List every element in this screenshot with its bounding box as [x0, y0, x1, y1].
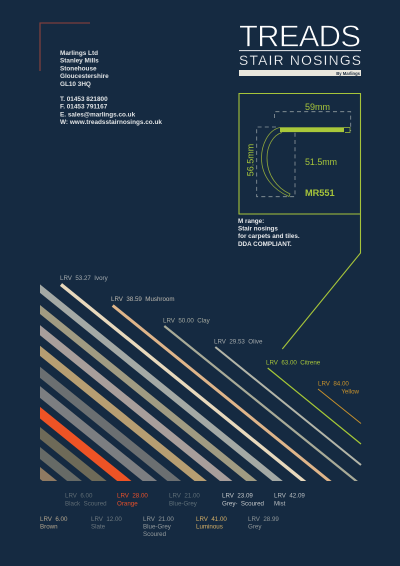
bottom legend row 2: Blue-Grey — [143, 524, 172, 531]
bottom legend row 2: Slate — [91, 524, 106, 531]
product description: Stair nosings — [238, 226, 278, 233]
product description: for carpets and tiles. — [238, 233, 300, 240]
profile diagram MR551: 56.5mm — [246, 144, 256, 176]
product description: DDA COMPLIANT. — [238, 241, 292, 248]
stripe labels: LRV 38.59 Mushroom — [111, 296, 175, 303]
bottom legend row 2: Brown — [40, 524, 58, 531]
bottom legend row 2: Luminous — [196, 524, 223, 531]
bottom legend row 2: LRV 21.00 — [143, 516, 174, 523]
logo: Treads Stair Nosings: By Marlings — [336, 71, 361, 76]
profile diagram MR551: MR551 — [305, 188, 335, 198]
bottom legend row 2 — [40, 516, 279, 538]
address block: Stonehouse — [60, 65, 97, 72]
stripe labels: LRV 29.53 Olive — [214, 338, 263, 346]
bottom legend row 1: LRV 23.09 — [222, 493, 253, 500]
address block: E. sales@marlings.co.uk — [60, 111, 136, 118]
bottom legend row 1: Grey- Scoured — [222, 500, 265, 507]
bottom legend row 1: LRV 6.00 — [65, 493, 93, 500]
bottom legend row 1: Blue-Grey — [169, 500, 198, 507]
stripe labels: Yellow — [341, 388, 360, 396]
bottom legend row 2: Scoured — [143, 531, 167, 538]
address block — [60, 50, 162, 126]
bottom legend row 1: Mist — [274, 500, 286, 507]
address block: GL10 3HQ — [60, 81, 91, 88]
bottom legend row 2: LRV 12.00 — [91, 516, 122, 523]
logo: Treads Stair Nosings: STAIR NOSINGS — [239, 53, 361, 68]
address block: W: www.treadsstairnosings.co.uk — [60, 119, 162, 126]
red corner bracket — [40, 23, 90, 71]
logo: Treads Stair Nosings — [239, 18, 361, 76]
stripe labels — [60, 275, 360, 396]
profile diagram MR551 — [246, 102, 351, 198]
logo: Treads Stair Nosings: TREADS — [239, 18, 361, 54]
bottom legend row 2: LRV 28.99 — [248, 516, 279, 523]
bottom legend row 1: LRV 42.09 — [274, 493, 305, 500]
bottom legend row 1: Orange — [117, 500, 138, 507]
address block: F. 01453 791167 — [60, 104, 108, 111]
bottom legend row 1: Black Scoured — [65, 500, 107, 507]
address block: T. 01453 821800 — [60, 96, 108, 103]
bottom legend row 2: LRV 41.00 — [196, 516, 227, 523]
bottom legend row 1: LRV 21.00 — [169, 493, 200, 500]
address block: Gloucestershire — [60, 73, 109, 80]
profile diagram MR551: 51.5mm — [305, 157, 337, 167]
address block: Stanley Mills — [60, 58, 99, 65]
stripe labels: LRV 50.00 Clay — [163, 318, 211, 324]
stripe labels: LRV 63.00 Citrene — [266, 360, 321, 366]
bottom legend row 2: Grey — [248, 524, 262, 531]
stripe labels: LRV 53.27 Ivory — [60, 275, 109, 282]
product description: M range: — [238, 218, 264, 225]
bottom legend row 2: LRV 6.00 — [40, 516, 68, 523]
product description — [238, 218, 300, 248]
stripe labels: LRV 84.00 — [318, 380, 349, 388]
bottom legend row 1 — [65, 493, 305, 507]
bottom legend row 1: LRV 28.00 — [117, 493, 148, 500]
diagonal colour stripes — [40, 283, 362, 481]
green frame with leader line — [239, 94, 360, 349]
address block: Marlings Ltd — [60, 50, 98, 57]
profile diagram MR551: 59mm — [305, 102, 330, 112]
